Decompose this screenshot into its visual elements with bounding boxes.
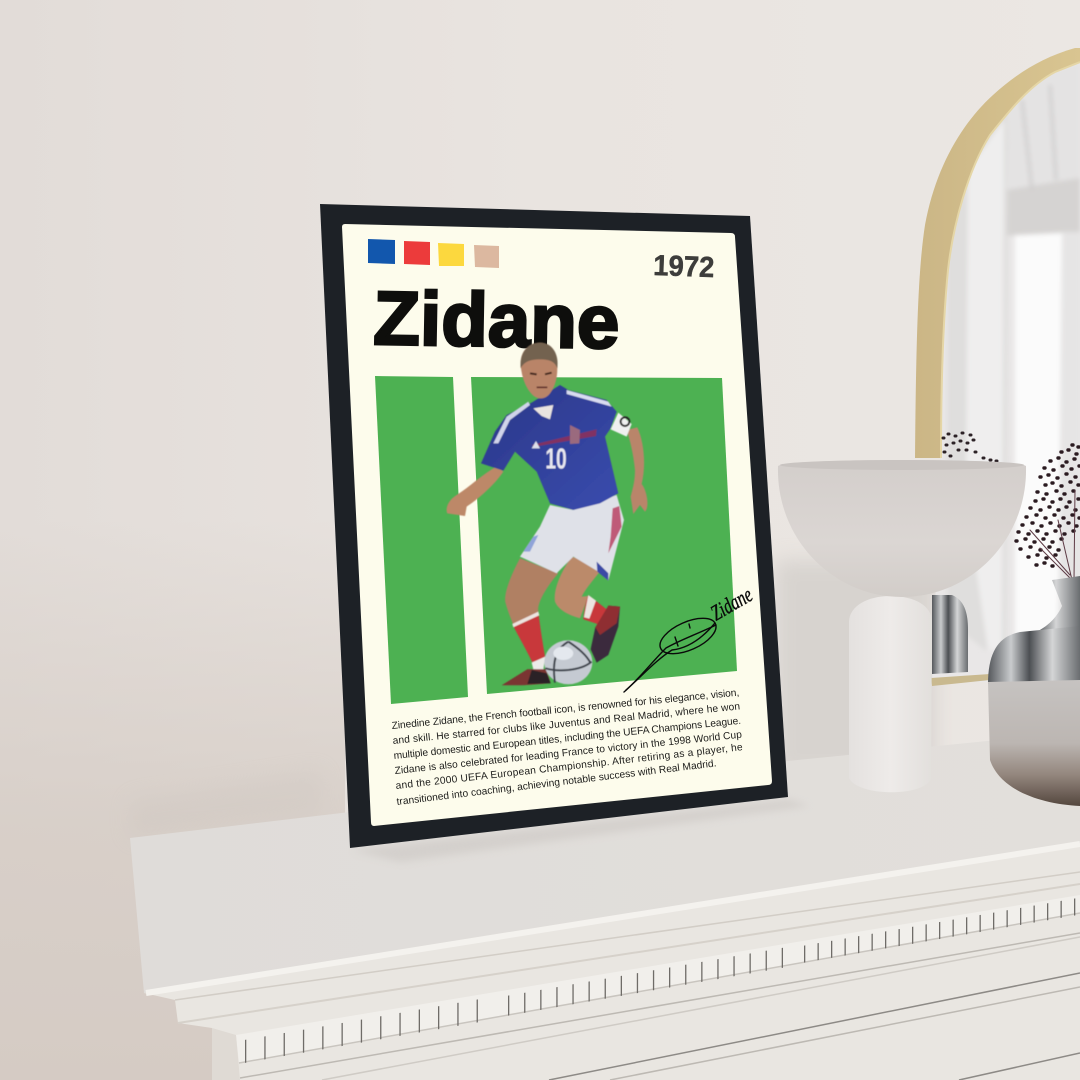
dentil row <box>245 906 1080 1051</box>
biography text: Zinedine Zidane, the French football icon, is renowned for his elegance, vision, <box>391 688 740 732</box>
near arm <box>447 467 503 516</box>
biography text: and the 2000 UEFA European Championship. After retiring as a player, he <box>395 742 743 792</box>
black frame <box>320 204 788 848</box>
glass and chrome vase <box>988 576 1080 806</box>
green panel: left <box>375 376 468 704</box>
biography text: multiple domestic and European titles, including the UEFA Champions League. <box>393 716 742 762</box>
biography text: Zidane is also celebrated for leading France to victory in the 1998 World Cup <box>394 730 743 777</box>
signature name: Zidane <box>706 582 757 625</box>
marble pedestal bowl <box>778 460 1026 792</box>
gold arched mirror <box>915 40 1080 690</box>
football <box>544 640 592 684</box>
left boot <box>502 669 551 685</box>
framed poster <box>320 204 788 848</box>
mirror chrome reflection <box>932 595 968 674</box>
dried flowers behind bowl <box>943 433 997 461</box>
biography text: transitioned into coaching, achieving notable success with Real Madrid. <box>396 758 717 808</box>
signature <box>624 582 757 692</box>
dried flowers in vase <box>1016 445 1080 580</box>
mantel front mouldings <box>144 843 1080 1080</box>
far arm <box>627 427 647 514</box>
jersey <box>481 385 618 510</box>
right leg <box>555 557 603 618</box>
green panel: right <box>471 377 737 694</box>
mirror gold inner edge <box>941 62 1080 458</box>
pedestal <box>849 596 932 792</box>
mantel top surface <box>130 732 1080 993</box>
mirror glass with curtains <box>930 40 1080 690</box>
biography text <box>391 688 743 808</box>
shirt number: 10 <box>545 443 567 475</box>
year: 1972 <box>653 250 715 284</box>
player figure <box>447 343 647 685</box>
left sock <box>512 612 545 663</box>
right sock <box>583 595 614 626</box>
shorts <box>520 495 624 581</box>
crest <box>570 425 580 444</box>
title: Zidane <box>373 276 620 365</box>
right boot <box>591 606 620 663</box>
shadow under frame <box>352 799 810 862</box>
head <box>521 343 557 398</box>
biography text: and skill. He starred for clubs like Juventus and Real Madrid, where he won <box>392 701 741 747</box>
cream paper <box>342 224 772 826</box>
colour swatches <box>368 239 499 268</box>
left leg <box>505 558 558 625</box>
armband <box>611 413 632 437</box>
fireplace mantel <box>130 732 1080 1080</box>
bowl <box>778 460 1026 597</box>
